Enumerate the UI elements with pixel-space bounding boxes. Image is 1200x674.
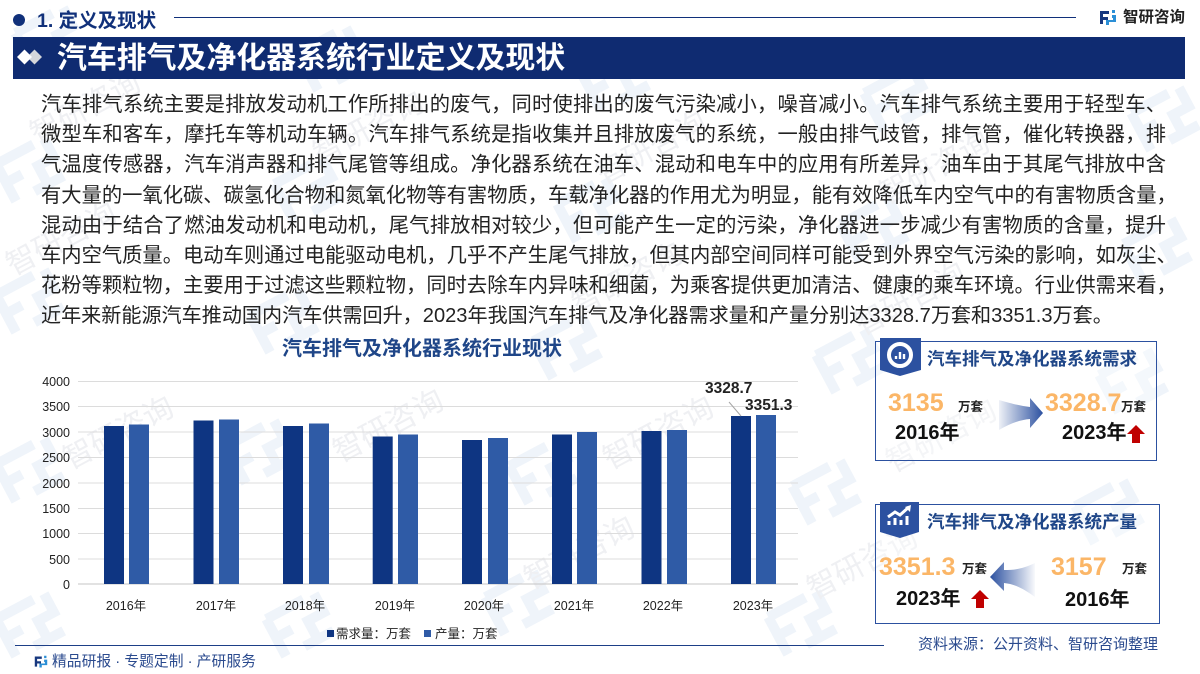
- year 2023: 2023年: [896, 588, 960, 610]
- background watermark pattern: 智研咨询: [591, 106, 712, 191]
- body paragraph: 近年来新能源汽车推动国内汽车供需回升，2023年我国汽车排气及净化器需求量和产量分别达3328.7万套和3351.3万套。: [41, 305, 1113, 327]
- data labels: 3351.3: [745, 397, 793, 414]
- arrow left: [990, 562, 1034, 596]
- footer logo: [34, 656, 48, 668]
- y axis labels: 3500: [42, 400, 70, 414]
- background watermark pattern: 智研咨询: [519, 511, 640, 596]
- unit: 万套: [962, 562, 987, 576]
- body paragraph: 混动由于结合了燃油发动机和电动机，尾气排放相对较少，但可能产生一定的污染，净化器进一步减少有害物质的含量，提升: [41, 215, 1166, 237]
- logo mark: [1100, 10, 1116, 25]
- y axis labels: 3000: [42, 426, 70, 440]
- title text: 汽车排气及净化器系统行业定义及现状: [57, 42, 565, 75]
- background watermark pattern: 智研咨询: [58, 391, 179, 476]
- year 2023: 2023年: [1062, 422, 1126, 444]
- section heading: [13, 10, 156, 32]
- y axis labels: 2000: [42, 477, 70, 491]
- x axis labels: 2023年: [733, 599, 773, 613]
- x axis labels: 2016年: [106, 599, 146, 613]
- y axis labels: 2500: [42, 451, 70, 465]
- legend: production: 产量：万套: [435, 627, 498, 641]
- title banner: [13, 37, 1185, 79]
- background watermark pattern: 智研咨询: [850, 257, 971, 342]
- brand logo top right: [1100, 8, 1185, 26]
- body paragraph: [41, 93, 1177, 327]
- icon: red up arrow: [1127, 425, 1145, 443]
- data source: 资料来源：公开资料、智研咨询整理: [918, 636, 1158, 653]
- chart legend: [327, 627, 498, 641]
- body paragraph: 有大量的一氧化碳、碳氢化合物和氮氧化物等有害物质，车载净化器的作用尤为明显，能有效降低车内空气中的有害物质含量，: [41, 185, 1177, 207]
- year 2016: 2016年: [895, 422, 960, 444]
- y axis labels: 4000: [42, 375, 70, 389]
- background watermark pattern: 智研咨询: [1, 197, 122, 282]
- unit: 万套: [1122, 562, 1147, 576]
- background watermark pattern: 智研咨询: [567, 237, 688, 322]
- x axis labels: 2022年: [643, 599, 683, 613]
- demand panel title: 汽车排气及净化器系统需求: [927, 349, 1137, 369]
- demand bars: [104, 416, 751, 584]
- x axis labels: 2019年: [375, 599, 415, 613]
- bar chart: [42, 375, 798, 613]
- brand name: 智研咨询: [1123, 9, 1185, 26]
- x axis labels: 2017年: [196, 599, 236, 613]
- value 2023: 3351.3: [879, 553, 955, 581]
- background watermark pattern: 智研咨询: [308, 86, 429, 171]
- background watermark pattern: 智研咨询: [328, 384, 449, 469]
- background watermark pattern: 智研咨询: [881, 394, 1002, 479]
- data labels: 3328.7: [705, 380, 752, 397]
- y axis labels: 1500: [42, 502, 70, 516]
- year 2016: 2016年: [1065, 589, 1130, 611]
- production bars: [129, 415, 776, 584]
- slogan text: 精品研报 · 专题定制 · 产研服务: [52, 654, 256, 670]
- footer rule: [15, 645, 884, 646]
- bullet dot: [13, 14, 25, 26]
- background watermark pattern: 智研咨询: [598, 391, 719, 476]
- body paragraph: 花粉等颗粒物，主要用于过滤这些颗粒物，同时去除车内异味和细菌，为乘客提供更加清洁、健康的乘车环境。行业供需来看，: [41, 275, 1177, 297]
- production panel title: 汽车排气及净化器系统产量: [927, 512, 1137, 532]
- body paragraph: 气温度传感器，汽车消声器和排气尾管等组成。净化器系统在油车、混动和电车中的应用有所差异，油车由于其尾气排放中含: [41, 154, 1166, 176]
- x axis labels: [106, 599, 773, 613]
- chart title: 汽车排气及净化器系统行业现状: [282, 338, 562, 360]
- x axis labels: 2018年: [285, 599, 325, 613]
- value 2016: 3135: [888, 389, 944, 417]
- header rule: [174, 17, 1076, 18]
- y axis labels: 1000: [42, 527, 70, 541]
- value 2016: 3157: [1051, 553, 1107, 581]
- arrow right: [999, 398, 1043, 430]
- body paragraph: 微型车和客车，摩托车等机动车辆。汽车排气系统是指收集并且排放废气的系统，一般由排气歧管，排气管，催化转换器，排: [41, 124, 1166, 146]
- y axis labels: 500: [49, 553, 70, 567]
- panel: production: [875, 504, 1160, 624]
- unit: 万套: [958, 400, 983, 414]
- x axis labels: 2021年: [554, 599, 594, 613]
- x axis labels: 2020年: [464, 599, 504, 613]
- icon: ribbon with pie chart: [880, 338, 921, 376]
- section heading text: 1. 定义及现状: [37, 10, 156, 32]
- y axis labels: [42, 375, 70, 592]
- background watermark pattern: 智研咨询: [25, 66, 146, 151]
- background watermark pattern: 智研咨询: [802, 521, 923, 606]
- body paragraph: 车内空气质量。电动车则通过电能驱动电机，几乎不产生尾气排放，但其内部空间同样可能受到外界空气污染的影响，如灰尘、: [41, 245, 1177, 267]
- icon: red up arrow: [971, 590, 989, 608]
- legend: demand: 需求量：万套: [336, 627, 411, 641]
- y axis labels: 0: [63, 578, 70, 592]
- diamond icon: [17, 50, 42, 64]
- panel: demand: [875, 341, 1157, 461]
- value 2023: 3328.7: [1045, 389, 1121, 417]
- icon: ribbon with growth chart: [880, 502, 919, 538]
- background watermark pattern: 智研咨询: [874, 126, 995, 211]
- body paragraph: 汽车排气系统主要是排放发动机工作所排出的废气，同时使排出的废气污染减小，噪音减小。汽车排气系统主要用于轻型车、: [41, 94, 1166, 116]
- footer slogan: [34, 653, 256, 670]
- unit: 万套: [1121, 400, 1146, 414]
- data labels: [705, 380, 793, 416]
